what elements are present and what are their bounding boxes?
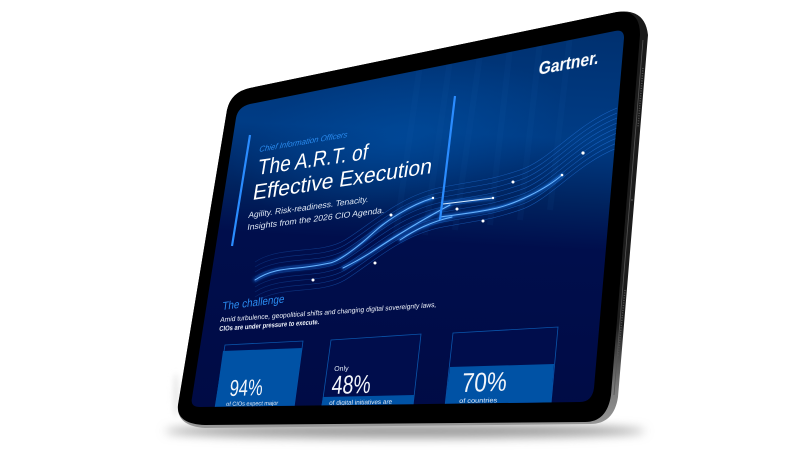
accent bar right <box>440 96 455 220</box>
subtitle: Agility. Risk-readiness. Tenacity. <box>248 194 369 220</box>
challenge text: Amid turbulence, geopolitical shifts and changing digital sovereignty laws, <box>220 302 437 324</box>
stat card: 48% <box>321 334 421 408</box>
wave lines <box>255 108 617 302</box>
challenge heading: The challenge <box>222 294 285 313</box>
stat card: 94% <box>215 341 303 408</box>
stat card: 48%: of digital initiatives are <box>329 399 393 407</box>
title: The A.R.T. of <box>256 139 371 180</box>
stat card: 70%: of countries <box>459 397 497 405</box>
eyebrow: Chief Information Officers <box>259 129 348 154</box>
screen <box>192 30 624 407</box>
tablet body <box>178 11 648 428</box>
logo: Gartner. <box>537 47 600 79</box>
tablet mockup infographic <box>165 12 648 444</box>
stat card: 94%: 94% <box>229 374 264 401</box>
challenge text <box>219 302 437 333</box>
device shadow <box>165 373 645 438</box>
subtitle <box>248 197 384 230</box>
challenge text: CIOs are under pressure to execute. <box>219 319 320 333</box>
title: Effective Execution <box>251 153 434 205</box>
accent bar left <box>232 135 250 246</box>
stat card: 48%: Only <box>334 366 349 373</box>
stat card: 70% <box>445 327 558 406</box>
stat card: 70%: 70% <box>460 366 508 398</box>
subtitle: Insights from the 2026 CIO Agenda. <box>247 205 385 232</box>
stat card: 48%: 48% <box>330 369 372 400</box>
screen background <box>192 30 624 407</box>
stat card: 94%: of CIOs expect major <box>226 401 278 408</box>
glowing nodes <box>312 151 585 282</box>
